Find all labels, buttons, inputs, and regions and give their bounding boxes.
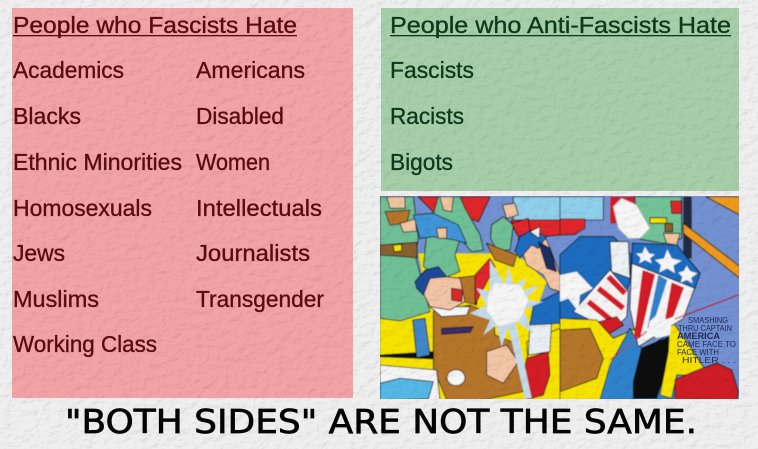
heading: people who anti-fascists hate: People who Anti-Fascists Hate xyxy=(390,12,731,38)
list: left column: Muslims xyxy=(13,286,99,312)
list: left column: Academics xyxy=(13,57,124,83)
list: anti-fascist targets: Racists xyxy=(390,103,464,129)
list: anti-fascist targets xyxy=(390,57,474,175)
list: anti-fascist targets: Bigots xyxy=(390,149,453,175)
list: left column: Ethnic Minorities xyxy=(13,149,182,175)
icon: shield xyxy=(630,243,700,347)
list: right column xyxy=(196,57,324,312)
slogan: "BOTH SIDES" ARE NOT THE SAME. xyxy=(65,402,697,441)
comic caption: AMERICA xyxy=(677,331,721,341)
list: right column: Transgender xyxy=(196,286,324,312)
comic caption xyxy=(677,316,736,365)
list: anti-fascist targets: Fascists xyxy=(390,57,474,83)
list: right column: Americans xyxy=(196,57,305,83)
list: left column: Blacks xyxy=(13,103,81,129)
icon: impact burst xyxy=(470,260,543,398)
panel: people who fascists hate xyxy=(12,8,353,398)
list: right column: Women xyxy=(196,149,270,175)
comic caption: SMASHING xyxy=(688,316,728,325)
list: right column: Disabled xyxy=(196,103,284,129)
comic caption: FACE WITH xyxy=(677,348,719,357)
list: left column: Jews xyxy=(13,240,65,266)
panel: people who anti-fascists hate xyxy=(381,8,739,191)
comic caption: HITLER . . . xyxy=(682,356,736,365)
list: left column: Homosexuals xyxy=(13,195,152,221)
comic caption: THRU CAPTAIN xyxy=(678,324,732,333)
list: left column: Working Class xyxy=(13,331,157,357)
list: right column: Intellectuals xyxy=(196,195,322,221)
list: right column: Journalists xyxy=(196,240,310,266)
comic caption: CAME FACE TO xyxy=(677,340,736,349)
list: left column xyxy=(13,57,182,357)
comic panel: captain america punching hitler xyxy=(380,196,740,400)
heading: people who fascists hate: People who Fascists Hate xyxy=(13,12,297,38)
